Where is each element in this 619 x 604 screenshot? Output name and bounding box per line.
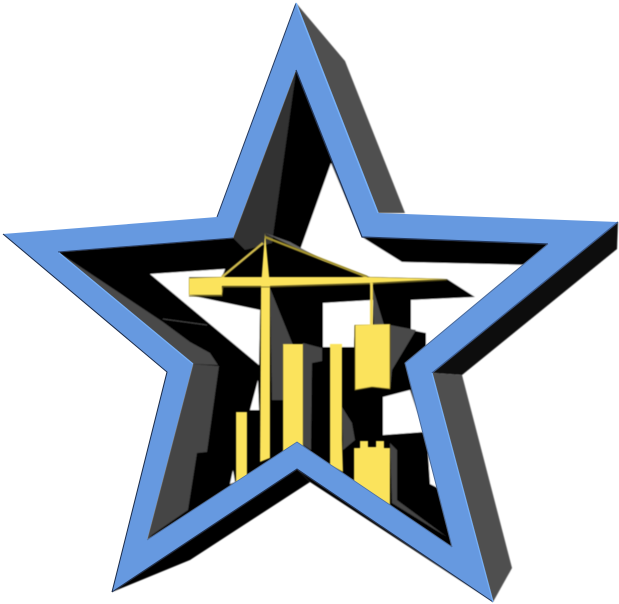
crane tower (260, 233, 270, 462)
frame edge shading (217, 3, 296, 217)
white gap: centre (323, 300, 373, 347)
white gap: lower right (383, 390, 424, 435)
crane jib (189, 277, 447, 295)
crane stays (222, 243, 263, 277)
crane cable (370, 283, 373, 325)
white gap: upper right (300, 163, 530, 351)
crane and skyline (189, 233, 447, 505)
building: castle block (354, 441, 390, 505)
building: tall centre left (283, 344, 303, 458)
grey inner faces (233, 72, 296, 250)
crane load (355, 324, 390, 390)
building: small left tower (236, 412, 247, 486)
building: narrow centre right (330, 344, 343, 472)
star opening with shadows (58, 70, 548, 547)
white gap: left of the tower (150, 269, 260, 365)
